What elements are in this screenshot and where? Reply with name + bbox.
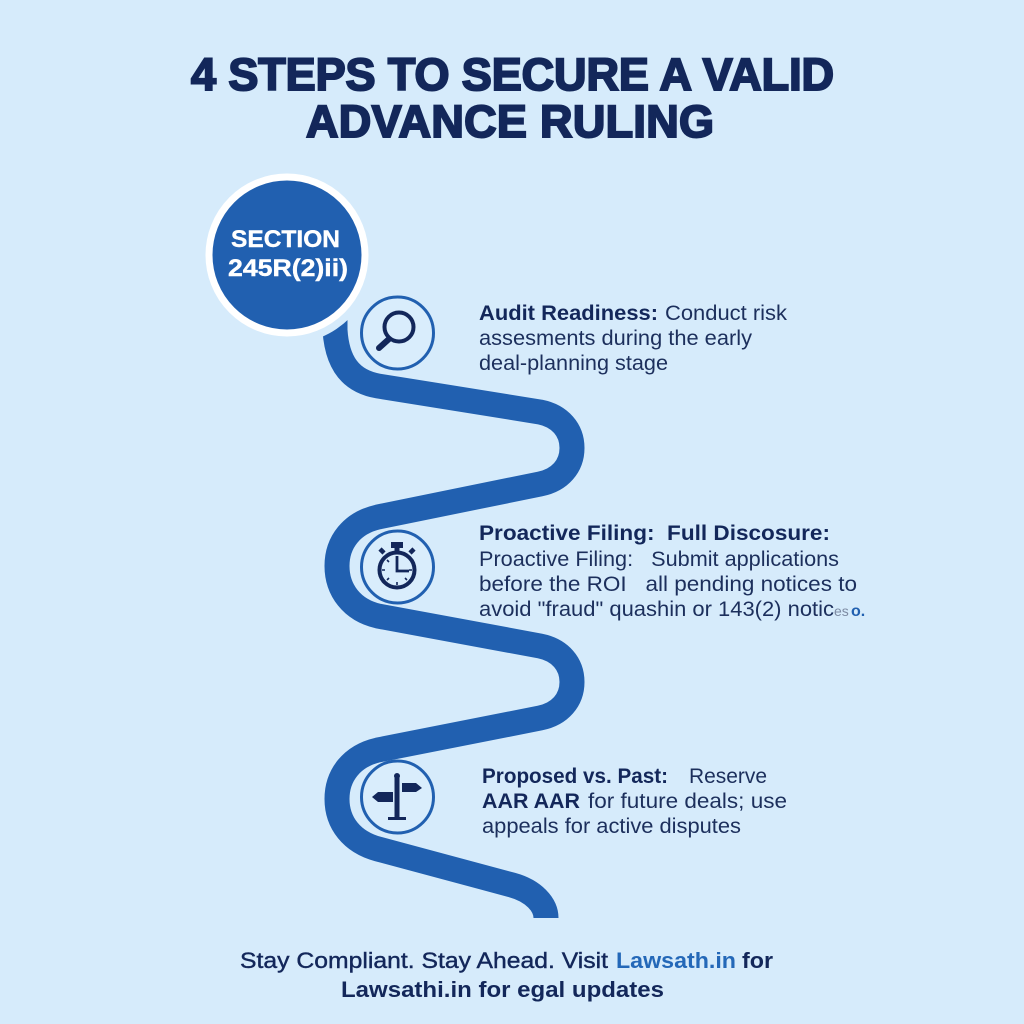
footer call to action: for (742, 948, 773, 973)
step 2 text: proactive filing and full disclosure (479, 522, 865, 621)
section badge: SECTION (231, 226, 340, 253)
step 3 text: proposed vs past: Proposed vs. Past: (482, 765, 668, 788)
step 1 text: audit readiness: Conduct risk (665, 302, 788, 325)
title (191, 49, 834, 147)
section badge (198, 166, 376, 344)
icon: magnifying glass (362, 297, 434, 369)
step 1 text: audit readiness: assesments during the early (479, 327, 753, 350)
footer call to action: Lawsathi.in for egal updates (341, 977, 664, 1002)
step 2 text: proactive filing and full disclosure: Proactive Filing: Submit applications (479, 548, 839, 571)
step 1 text: audit readiness (479, 302, 788, 375)
winding path (335, 310, 572, 918)
step 2 text: proactive filing and full disclosure: Proactive Filing: Full Discosure: (479, 522, 830, 545)
step 3 text: proposed vs past (482, 765, 787, 838)
footer call to action (240, 948, 773, 1002)
icon: signpost (362, 761, 434, 833)
step 2 text: proactive filing and full disclosure: o. (851, 603, 865, 620)
title: ADVANCE RULING (306, 96, 714, 147)
step 3 text: proposed vs past: appeals for active disputes (482, 815, 741, 838)
icon: stopwatch (362, 531, 434, 603)
step 1 text: audit readiness: Audit Readiness: (479, 302, 658, 325)
step 2 text: proactive filing and full disclosure: before the ROI all pending notices to (479, 573, 857, 596)
step 3 text: proposed vs past: AAR AAR (482, 790, 580, 813)
step 2 text: proactive filing and full disclosure: avoid "fraud" quashin or 143(2) notic (479, 598, 834, 621)
footer call to action: Stay Compliant. Stay Ahead. Visit (240, 948, 608, 973)
step 3 text: proposed vs past: for future deals; use (588, 790, 787, 813)
title: 4 STEPS TO SECURE A VALID (191, 49, 834, 100)
section badge: 245R(2)ii) (228, 255, 348, 282)
step 1 text: audit readiness: deal-planning stage (479, 352, 668, 375)
step 3 text: proposed vs past: Reserve (689, 765, 767, 788)
step 2 text: proactive filing and full disclosure: es (834, 603, 849, 619)
footer call to action: Lawsath.in (616, 948, 736, 973)
